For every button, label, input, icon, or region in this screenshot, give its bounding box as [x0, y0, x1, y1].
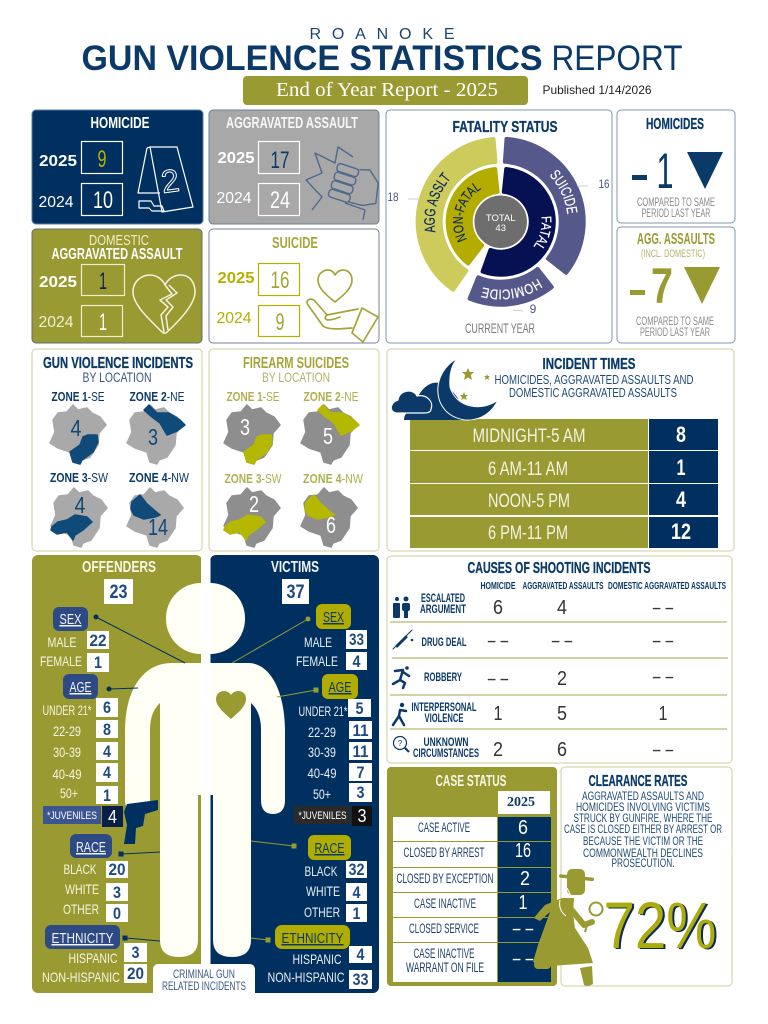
published date: Published 1/14/2026: [542, 83, 652, 97]
map: zone 2: [301, 405, 359, 464]
map: zone 1: [224, 405, 280, 464]
panel: firearm suicides by location: ZONE 1-SE: [226, 389, 280, 404]
sex group: 33: [349, 630, 364, 649]
panel: firearm suicides by location: BY LOCATION: [262, 369, 330, 385]
panel: gun violence incidents by location: ZONE 4-NW: [129, 470, 190, 485]
victims data: [232, 579, 372, 989]
icon: handgun: [124, 800, 158, 844]
panel: homicide: 9: [98, 146, 106, 173]
race group: 1: [352, 904, 360, 923]
age group: 1: [103, 786, 111, 805]
row: unknown circumstances: – –: [653, 742, 674, 757]
case table: CASE INACTIVE: [414, 896, 476, 911]
panel: homicide: 2025: [39, 153, 77, 170]
criminal gun related incidents tab: RELATED INCIDENTS: [162, 979, 246, 993]
panel: firearm suicides by location: ZONE 3-SW: [224, 471, 282, 486]
row: interpersonal violence: [393, 702, 668, 725]
race group: 4: [352, 883, 361, 902]
ethnicity group: ETHNICITY: [52, 930, 114, 947]
age group: UNDER 21*: [42, 702, 92, 718]
donut chart: AGG ASSLT: [424, 172, 450, 232]
row: escalated argument: ARGUMENT: [420, 604, 466, 616]
age group: [277, 674, 372, 802]
time table: 12: [671, 519, 691, 544]
case table: CASE ACTIVE: [418, 820, 470, 835]
panel: domestic aggravated assault: 2024: [38, 314, 74, 331]
panel: gun violence incidents by location: ZONE 3-SW: [50, 470, 109, 485]
panel: homicides change: [617, 110, 735, 223]
panel: suicide: [209, 229, 379, 343]
column headers: HOMICIDE: [480, 581, 516, 592]
juveniles: [294, 806, 372, 826]
panel: aggravated assault: [209, 110, 385, 224]
icon: two people arguing: [393, 596, 410, 618]
panel: homicides change: COMPARED TO SAME: [637, 195, 715, 209]
sex group: SEX: [60, 611, 82, 628]
ethnicity group: 3: [132, 943, 140, 962]
sex group: 22: [90, 631, 106, 650]
panel: fatality status: FATALITY STATUS: [452, 119, 558, 136]
icon: detective figure: [533, 869, 602, 986]
panel: suicide: 16: [270, 267, 290, 294]
subtitle banner: End of Year Report - 2025: [276, 79, 498, 101]
row: interpersonal violence: 5: [557, 703, 567, 725]
panel: domestic aggravated assault: 2025: [39, 274, 77, 291]
icon: down triangle: [687, 152, 723, 189]
age group: UNDER 21*: [298, 703, 348, 719]
icon: evidence marker: [138, 147, 193, 212]
race group: BLACK: [304, 863, 338, 879]
donut chart: 43: [495, 223, 506, 234]
criminal gun related incidents tab: [153, 964, 255, 1000]
panel: suicide: SUICIDE: [272, 235, 318, 252]
sex group: [40, 607, 185, 672]
map: zone 3: 2: [249, 491, 259, 517]
panel: gun violence incidents by location: GUN VIOLENCE INCIDENTS: [43, 355, 193, 372]
clearance description: AGGRAVATED ASSAULTS AND: [582, 789, 704, 803]
donut chart: SUICIDE: [550, 170, 578, 214]
age group: [42, 674, 138, 805]
age group: AGE: [328, 679, 352, 696]
row: unknown circumstances: UNKNOWN: [424, 737, 468, 749]
icon: heart: [216, 691, 246, 719]
row: interpersonal violence: 1: [494, 703, 502, 725]
clearance description: HOMICIDES INVOLVING VICTIMS: [576, 800, 710, 814]
time table: 6 AM-11 AM: [488, 459, 568, 480]
race group: [251, 835, 367, 923]
case table: 2: [520, 868, 530, 890]
ethnicity group: [251, 925, 372, 989]
row: robbery: 2: [557, 668, 567, 690]
panel: offenders: [32, 555, 202, 993]
title: REPORT: [552, 39, 682, 78]
time table: 1: [676, 455, 686, 480]
age group: 40-49: [52, 766, 82, 782]
time table: 6 PM-11 PM: [488, 523, 568, 544]
panel: domestic aggravated assault: DOMESTIC: [89, 232, 149, 249]
panel: homicide: HOMICIDE: [90, 115, 150, 132]
panel: domestic aggravated assault: 1: [99, 268, 107, 295]
panel: aggravated assault: 24: [270, 187, 290, 214]
icon: syringe: [393, 630, 413, 649]
time table: 8: [676, 422, 686, 447]
row: interpersonal violence: 1: [658, 703, 668, 725]
icon: evidence marker: 2: [159, 162, 181, 200]
ethnicity group: 20: [127, 964, 144, 983]
donut chart: 16: [598, 177, 610, 191]
donut chart: TOTAL: [486, 213, 516, 224]
row: escalated argument: – –: [653, 600, 674, 615]
race group: WHITE: [65, 881, 99, 897]
row: unknown circumstances: 2: [493, 739, 503, 761]
panel: incident times: HOMICIDES, AGGRAVATED ASSAULTS AND: [494, 372, 694, 387]
icon: magnifier with question mark: [394, 736, 409, 752]
panel: homicide: [32, 110, 203, 224]
panel: domestic aggravated assault: AGGRAVATED ASSAULT: [52, 246, 183, 263]
panel: gun violence incidents by location: ZONE 2-NE: [130, 389, 185, 404]
case table: – –: [513, 951, 534, 966]
age group: 40-49: [308, 765, 337, 781]
juveniles: 3: [358, 806, 366, 826]
column headers: [480, 581, 726, 592]
row: unknown circumstances: [394, 736, 674, 761]
panel: case status: CASE STATUS: [436, 773, 507, 790]
case table: [393, 817, 551, 982]
panel: case status: [387, 767, 557, 986]
race group: RACE: [76, 839, 106, 856]
row: unknown circumstances: 6: [557, 739, 567, 761]
panel: agg assaults change: [617, 227, 735, 343]
panel: fatality status: [386, 110, 612, 344]
race group: BLACK: [64, 861, 97, 877]
map: zone 1: 3: [240, 414, 250, 440]
panel: victims: VICTIMS: [271, 559, 319, 576]
panel: aggravated assault: 2025: [218, 150, 255, 167]
map: zone 4: 14: [148, 514, 168, 540]
map: zone 4: 6: [326, 512, 336, 538]
sex group: FEMALE: [296, 653, 338, 669]
panel: homicides change: 1: [656, 143, 674, 199]
title: GUN VIOLENCE STATISTICS: [82, 39, 542, 78]
map: zone 3: 4: [74, 492, 86, 518]
panel: agg assaults change: (INCL. DOMESTIC): [641, 248, 705, 260]
ethnicity group: [42, 925, 160, 985]
panel: clearance rates: CLEARANCE RATES: [588, 773, 688, 790]
total offenders: 23: [110, 582, 128, 603]
total victims: [282, 579, 309, 604]
sex group: SEX: [323, 609, 344, 626]
panel: homicide: 10: [93, 187, 113, 214]
icon: person striking: [393, 703, 406, 725]
sex group: 4: [352, 652, 361, 671]
map: zone 4: [301, 488, 357, 547]
panel: agg assaults change: 7: [651, 258, 673, 314]
sex group: 1: [94, 653, 102, 672]
race group: RACE: [314, 840, 344, 857]
panel: agg assaults change: COMPARED TO SAME: [636, 314, 714, 328]
clearance description: BECAUSE THE VICTIM OR THE: [583, 834, 703, 848]
case table: CLOSED SERVICE: [409, 921, 479, 936]
panel: victims: [210, 555, 379, 993]
panel: gun violence incidents by location: ZONE 1-SE: [52, 389, 105, 404]
panel: firearm suicides by location: FIREARM SUICIDES: [243, 355, 349, 372]
sex group: FEMALE: [40, 653, 82, 669]
panel: incident times: INCIDENT TIMES: [542, 356, 636, 373]
age group: 30-39: [53, 744, 81, 760]
panel: suicide: 2024: [216, 310, 252, 327]
age group: 4: [103, 742, 111, 761]
ethnicity group: HISPANIC: [292, 951, 342, 967]
row: interpersonal violence: INTERPERSONAL: [412, 702, 476, 714]
row: escalated argument: ESCALATED: [421, 593, 465, 605]
row: interpersonal violence: VIOLENCE: [424, 713, 464, 725]
subtitle banner: [243, 76, 528, 105]
age group: 3: [356, 783, 364, 802]
donut chart: FATAL: [533, 216, 552, 248]
panel: clearance rates: [561, 767, 732, 986]
panel: homicides change: PERIOD LAST YEAR: [642, 206, 711, 220]
icon: broken heart: [133, 275, 195, 333]
case table: 1: [518, 892, 528, 914]
donut chart: HOMICIDE: [481, 278, 542, 300]
clearance description: PROSECUTION.: [612, 856, 674, 870]
header: [82, 26, 682, 105]
age group: AGE: [70, 679, 92, 696]
row: robbery: – –: [653, 669, 674, 684]
total offenders: [104, 579, 133, 604]
case table: CASE INACTIVE: [414, 946, 474, 961]
case table: CLOSED BY ARREST: [404, 845, 484, 860]
juveniles: 4: [108, 807, 117, 827]
age group: 5: [356, 699, 364, 718]
age group: 50+: [60, 785, 78, 801]
age group: 50+: [313, 786, 331, 802]
race group: WHITE: [306, 883, 340, 899]
icon: fist impact: [306, 147, 385, 220]
race group: OTHER: [63, 901, 99, 917]
row: robbery: [393, 666, 674, 690]
map: zone 3: [51, 488, 107, 547]
panel: agg assaults change: AGG. ASSAULTS: [637, 231, 715, 248]
panel: aggravated assault: 2024: [216, 190, 252, 207]
sex group: [232, 604, 367, 671]
panel: causes of shooting incidents: CAUSES OF SHOOTING INCIDENTS: [468, 560, 651, 577]
panel: causes of shooting incidents: [387, 556, 732, 763]
juveniles: *JUVENILES: [298, 810, 346, 822]
sex group: MALE: [304, 634, 332, 650]
case table: 16: [515, 840, 531, 862]
figure: split human silhouette: [125, 555, 285, 1000]
juveniles: *JUVENILES: [47, 810, 97, 822]
panel: offenders: OFFENDERS: [82, 559, 156, 576]
row: drug deal: – –: [653, 633, 674, 648]
city name: ROANOKE: [310, 26, 454, 43]
donut chart: 18: [388, 190, 399, 204]
case table: WARRANT ON FILE: [406, 960, 484, 975]
row: unknown circumstances: CIRCUMSTANCES: [413, 748, 479, 760]
panel: domestic aggravated assault: [32, 229, 202, 343]
row: drug deal: – –: [552, 633, 573, 648]
row: escalated argument: 6: [493, 597, 503, 619]
panel: homicide: 2024: [38, 194, 74, 211]
panel: domestic aggravated assault: 1: [99, 309, 107, 336]
race group: OTHER: [304, 904, 340, 920]
panel: case status: 2025: [507, 795, 535, 810]
panel: aggravated assault: AGGRAVATED ASSAULT: [226, 115, 358, 132]
age group: 11: [352, 721, 368, 740]
donut chart: 9: [530, 302, 537, 316]
panel: firearm suicides by location: [209, 349, 379, 551]
clearance description: [564, 789, 722, 870]
time table: 4: [676, 487, 687, 512]
map: zone 3: [224, 488, 280, 547]
ethnicity group: NON-HISPANIC: [268, 969, 344, 985]
row: escalated argument: 4: [557, 597, 567, 619]
row: drug deal: [393, 630, 674, 649]
row: drug deal: – –: [488, 633, 509, 648]
panel: firearm suicides by location: ZONE 2-NE: [304, 389, 359, 404]
clearance description: COMMONWEALTH DECLINES: [583, 846, 703, 860]
donut chart: NON-FATAL: [452, 183, 482, 242]
criminal gun related incidents tab: CRIMINAL GUN: [173, 967, 235, 981]
age group: 6: [103, 698, 111, 717]
ethnicity group: NON-HISPANIC: [42, 969, 120, 985]
map: zone 2: [127, 405, 185, 464]
panel: gun violence incidents by location: [32, 349, 202, 551]
panel: gun violence incidents by location: BY LOCATION: [82, 369, 152, 385]
map: zone 1: [50, 405, 106, 464]
icon: magnifier with question mark: ?: [398, 739, 403, 748]
map: zone 2: 5: [323, 423, 333, 449]
time table: MIDNIGHT-5 AM: [472, 426, 586, 447]
icon: running robber: [393, 666, 409, 688]
map: zone 1: 4: [70, 415, 82, 441]
sex group: MALE: [48, 634, 76, 650]
icon: heart in hand: [307, 270, 378, 342]
age group: 22-29: [53, 723, 81, 739]
clearance percentage: 72%: [604, 888, 716, 962]
panel: homicides change: HOMICIDES: [646, 116, 704, 133]
panel: suicide: 9: [276, 309, 284, 336]
donut chart: [388, 136, 610, 316]
total victims: 37: [286, 582, 304, 603]
time table: [410, 419, 718, 548]
panel: aggravated assault: 17: [270, 147, 290, 174]
panel: suicide: 2025: [218, 270, 255, 287]
age group: 22-29: [308, 724, 336, 740]
juveniles: [43, 806, 123, 827]
time table: NOON-5 PM: [488, 491, 570, 512]
panel: fatality status: CURRENT YEAR: [465, 320, 535, 336]
panel: incident times: DOMESTIC AGGRAVATED ASSAULTS: [509, 385, 677, 400]
case table: 6: [518, 817, 528, 839]
race group: 20: [108, 860, 126, 879]
panel: agg assaults change: PERIOD LAST YEAR: [640, 325, 710, 339]
race group: 3: [113, 883, 121, 902]
clearance percentage: 72%: [606, 889, 718, 963]
row: escalated argument: [393, 593, 674, 619]
ethnicity group: HISPANIC: [68, 950, 118, 966]
race group: 32: [348, 860, 364, 879]
row: drug deal: DRUG DEAL: [422, 637, 466, 649]
age group: 30-39: [308, 744, 336, 760]
case table: – –: [513, 921, 534, 936]
panel: firearm suicides by location: ZONE 4-NW: [303, 471, 364, 486]
age group: 7: [356, 763, 364, 782]
race group: [63, 834, 160, 923]
map: zone 2: 3: [148, 424, 158, 450]
ethnicity group: 4: [356, 945, 365, 964]
offenders data: [40, 579, 185, 985]
case table: CLOSED BY EXCEPTION: [396, 871, 494, 886]
age group: 4: [103, 763, 111, 782]
map: zone 4: [127, 488, 183, 547]
icon: down triangle olive: [684, 267, 720, 304]
race group: 0: [113, 904, 121, 923]
row: robbery: – –: [488, 671, 509, 686]
icon: moon, clouds and stars: [391, 358, 498, 420]
ethnicity group: 33: [352, 970, 368, 989]
age group: 11: [352, 742, 368, 761]
column headers: AGGRAVATED ASSAULTS: [522, 581, 604, 592]
age group: 8: [103, 720, 111, 739]
ethnicity group: ETHNICITY: [282, 930, 344, 947]
panel: incident times: [387, 349, 734, 551]
row: robbery: ROBBERY: [424, 672, 462, 684]
